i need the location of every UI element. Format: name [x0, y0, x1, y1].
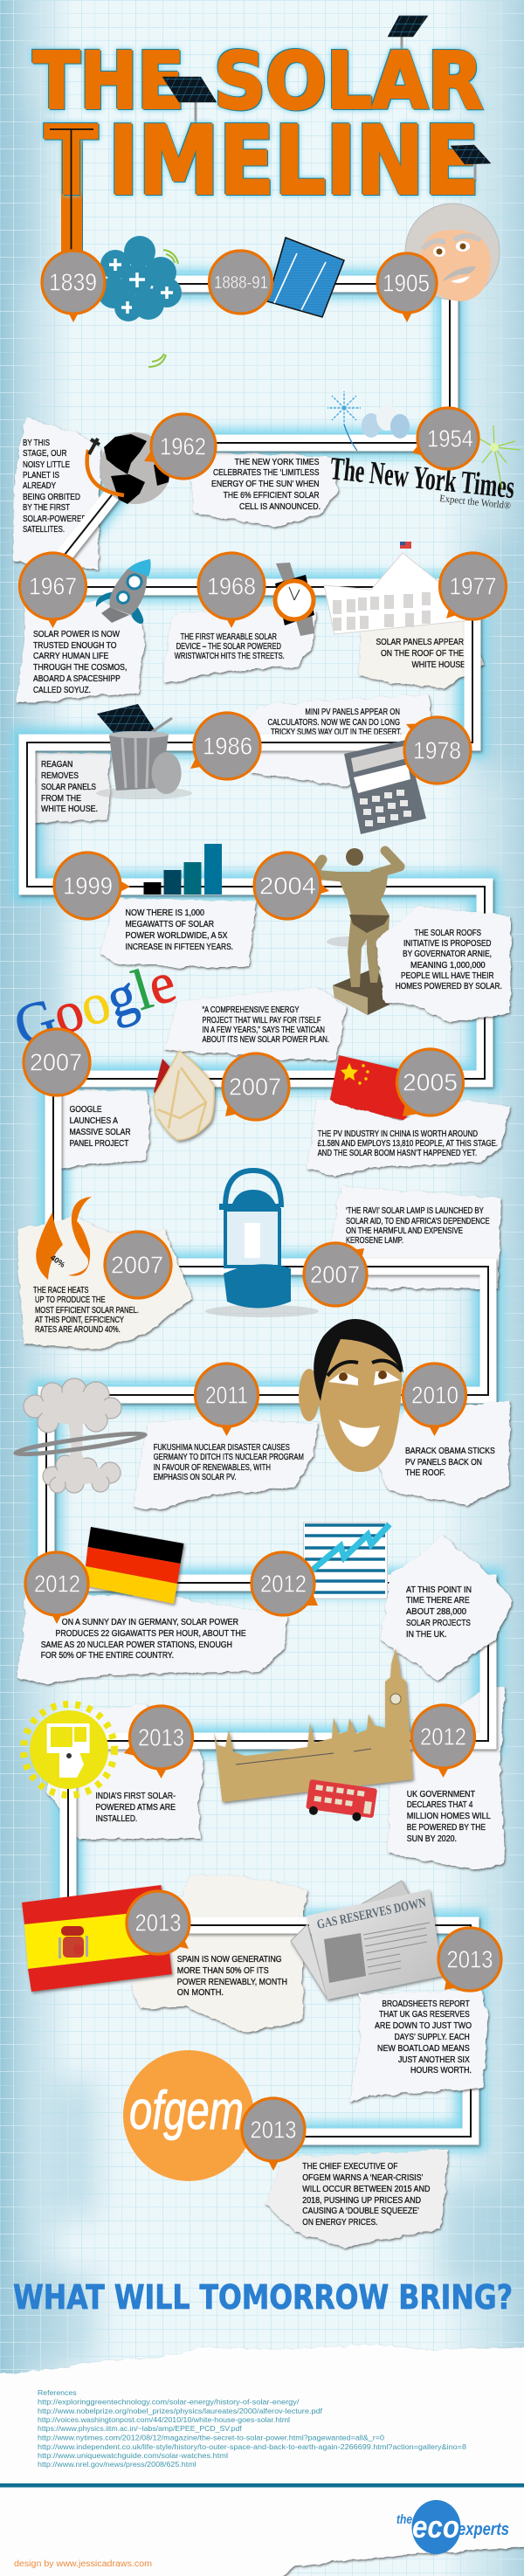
year marker: 1967: 1967 — [29, 573, 77, 599]
note: 2007 Google: MASSIVE SOLAR — [70, 1128, 131, 1137]
note: 1962 satellites: NOISY LITTLE — [23, 460, 70, 470]
note: 2013 Spain: MORE THAN 50% OF ITS — [177, 1966, 269, 1976]
year marker: 2007 efficiency: 2007 — [111, 1251, 163, 1279]
note: 1977 White House: WHITE HOUSE — [412, 660, 465, 670]
note: 2007 efficiency race: MOST EFFICIENT SOLAR PANEL. — [35, 1306, 139, 1316]
note: 2004 solar roofs: INITIATIVE IS PROPOSED — [403, 939, 491, 949]
note: 2004 solar roofs — [376, 907, 511, 1022]
note: 2004 solar roofs: PEOPLE WILL HAVE THEIR — [401, 971, 494, 981]
note: 1978 calculators: CALCULATORS. NOW WE CAN DO LONG — [267, 718, 400, 728]
note: 2004 solar roofs: THE SOLAR ROOFS — [414, 929, 481, 938]
icon: Houses of Parliament — [214, 1648, 413, 1802]
title stem: orange T running to 1839 — [61, 123, 82, 254]
note: 2011 Fukushima: FUKUSHIMA NUCLEAR DISASTER CAUSES — [154, 1443, 290, 1453]
year marker: 1954 — [412, 408, 479, 469]
note: 2013 India: INDIA’S FIRST SOLAR- — [95, 1792, 176, 1801]
icon: calculator — [344, 740, 426, 834]
chart icon: rising arrow — [304, 1523, 390, 1599]
note: 1962 satellites: BY THE FIRST — [23, 503, 70, 513]
note: 2012 solar projects: AT THIS POINT IN — [406, 1585, 472, 1595]
rail glow — [27, 284, 488, 2137]
icon: green firework — [476, 425, 521, 489]
note: 1986 Reagan: WHITE HOUSE. — [41, 805, 98, 814]
note: 1977 White House: SOLAR PANELS APPEAR — [376, 638, 464, 647]
note: 2013 gas reserves: THAT UK GAS RESERVES — [379, 2010, 470, 2020]
year marker: 2010 — [403, 1364, 466, 1436]
note: 2007 efficiency race: UP TO PRODUCE THE — [35, 1295, 106, 1305]
note: 2013 Spain: SPAIN IS NOW GENERATING — [177, 1955, 282, 1965]
note: 2007 Ravi lamp: KEROSENE LAMP. — [346, 1236, 403, 1246]
year marker: 2012 Germany: 2012 — [34, 1571, 80, 1597]
icon: solar cell — [267, 238, 344, 317]
note: 1978 calculators: TRICKY SUMS WAY OUT IN THE DESERT. — [271, 728, 402, 737]
note: 2007 Vatican — [164, 987, 346, 1060]
year marker: 2007 efficiency — [105, 1232, 171, 1298]
note: 2007 Vatican: PROJECT THAT WILL PAY FOR ITSELF — [203, 1016, 321, 1026]
logo: the eco experts — [396, 2500, 509, 2554]
references: References — [38, 2388, 77, 2397]
note: 2013 gas reserves: NEW BOATLOAD MEANS — [377, 2044, 470, 2054]
note: 2013 gas reserves — [349, 1990, 488, 2103]
year marker: 1954: 1954 — [427, 425, 473, 452]
year marker: 2005 — [396, 1049, 463, 1116]
year marker: 2013 gas reserves: 2013 — [447, 1946, 493, 1972]
year marker: 2004: 2004 — [259, 872, 316, 900]
note: 2007 Vatican: “A COMPREHENSIVE ENERGY — [203, 1005, 300, 1015]
references: http://exploringgreentechnology.com/solar-energy/history-of-solar-energy/ — [38, 2398, 300, 2407]
year marker: 2007 lamp — [304, 1243, 367, 1306]
note: 2012 solar projects: IN THE UK. — [406, 1630, 447, 1640]
note: 2012 UK government — [388, 1686, 505, 1869]
note: 1999 megawatts: NOW THERE IS 1,000 — [126, 908, 204, 918]
note: 2011 Fukushima: IN FAVOUR OF RENEWABLES, WITH — [154, 1463, 271, 1473]
icon: atom cluster — [98, 236, 182, 367]
icon: Obama — [299, 1319, 403, 1472]
year marker: 2013 India: 2013 — [138, 1724, 184, 1751]
note: 2005 China: AND THE SOLAR BOOM HASN’T HAPPENED YET. — [318, 1149, 477, 1158]
note: 1968 wristwatch — [164, 607, 316, 683]
note: 1999 megawatts — [100, 898, 256, 967]
year marker: 1977 — [440, 553, 507, 619]
references: http://www.independent.co.uk/life-style/history/to-outer-space-and-back-to-earth-again-2266699.html?action=gallery&ino=8 — [38, 2442, 466, 2451]
note: 2012 UK government: BE POWERED BY THE — [407, 1823, 486, 1833]
note: 2013 India: POWERED ATMS ARE — [95, 1803, 176, 1813]
note: 1962 New York Times: THE 6% EFFICIENT SOLAR — [224, 491, 320, 501]
note: 2013 Ofgem: 2018, PUSHING UP PRICES AND — [302, 2196, 421, 2206]
references: http://voices.washingtonpost.com/44/2010/10/white-house-goes-solar.html — [38, 2415, 290, 2424]
note: 2010 Obama — [377, 1400, 510, 1505]
note: 2012 Germany: ON A SUNNY DAY IN GERMANY, SOLAR POWER — [62, 1618, 238, 1627]
note: 2007 efficiency race: THE RACE HEATS — [33, 1286, 89, 1295]
year marker: 2004 — [254, 853, 329, 919]
note: 2007 efficiency race: RATES ARE AROUND 40%. — [35, 1325, 121, 1335]
year marker: 1968: 1968 — [207, 573, 256, 599]
icon: sun ATM — [24, 1704, 114, 1795]
icon: rocket — [96, 559, 151, 624]
note: 2012 UK government: SUN BY 2020. — [407, 1834, 457, 1844]
note: 2012 solar projects — [381, 1535, 513, 1680]
references: http://www.uniquewatchguide.com/solar-watches.html — [38, 2451, 228, 2460]
year marker: 2011: 2011 — [205, 1382, 248, 1408]
logo: Google: Google — [7, 950, 183, 1059]
note: 1967 Soyuz: CARRY HUMAN LIFE — [33, 652, 109, 661]
note: 2012 UK government: UK GOVERNMENT — [407, 1790, 475, 1799]
note: 1986 Reagan: SOLAR PANELS — [41, 783, 96, 792]
icon: papal mitre — [154, 1051, 214, 1140]
year marker: 1986 — [190, 713, 260, 779]
note: 1962 New York Times — [192, 452, 337, 527]
note: 1962 satellites: BEING ORBITED — [23, 493, 80, 502]
icon: White House — [324, 542, 488, 634]
note: 2005 China — [307, 1099, 510, 1177]
icon: trash can with solar panel — [96, 704, 192, 799]
note: 2012 Germany: SAME AS 20 NUCLEAR POWER STATIONS, ENOUGH — [41, 1640, 232, 1650]
note: 1962 New York Times: THE NEW YORK TIMES — [235, 458, 320, 467]
year marker: 1968 — [198, 553, 265, 628]
note: 2012 solar projects: TIME THERE ARE — [406, 1596, 470, 1606]
year marker: 2013 Spain: 2013 — [134, 1910, 182, 1936]
title: The Solar Timeline — [33, 16, 491, 254]
note: 2004 solar roofs: BY GOVERNATOR ARNIE, — [403, 950, 492, 959]
note: 2007 efficiency race: AT THIS POINT, EFFICIENCY — [35, 1316, 124, 1325]
year marker: 2012 UK: 2012 — [420, 1723, 466, 1751]
note: 1962 satellites: ALREADY — [23, 481, 56, 491]
note: 2012 Germany: FOR 50% OF THE ENTIRE COUNTRY. — [41, 1651, 174, 1661]
note: 2013 Spain — [130, 1875, 307, 2033]
year marker: 2013 India — [124, 1706, 192, 1778]
note: 1967 Soyuz: SOLAR POWER IS NOW — [33, 630, 120, 639]
year marker: 2013 gas reserves — [438, 1928, 501, 1991]
icon: Einstein — [405, 204, 500, 301]
year marker: 1978 — [404, 717, 471, 784]
panel icon: title solar panels — [196, 16, 475, 182]
year marker: 2011 — [196, 1364, 259, 1436]
note: 1986 Reagan: REMOVES — [41, 771, 79, 781]
note: 2012 UK government: DECLARES THAT 4 — [407, 1800, 473, 1810]
note: 1962 satellites — [13, 418, 100, 570]
icon: Arnie statue — [313, 848, 400, 1015]
year markers — [19, 251, 507, 2171]
icon: solar lantern — [205, 1171, 319, 1317]
note: 2012 solar projects: SOLAR PROJECTS — [406, 1619, 471, 1628]
note: 2004 solar roofs: HOMES POWERED BY SOLAR. — [396, 982, 502, 991]
title: The Solar Timeline: SOLAR — [214, 35, 483, 126]
logo: Ofgem: ofgem — [129, 2081, 244, 2141]
note: 2007 Google: LAUNCHES A — [70, 1116, 118, 1126]
logo: the eco experts: experts — [458, 2520, 509, 2539]
year marker: 2013 Ofgem: 2013 — [250, 2116, 297, 2144]
note: 1977 White House — [359, 620, 483, 688]
note: 2011 Fukushima — [134, 1418, 318, 1509]
note: 1968 wristwatch: WRISTWATCH HITS THE STREETS. — [175, 652, 285, 661]
references: http://www.nytimes.com/2012/08/12/magazine/the-secret-to-solar-power.html?pagewanted=all&_r=0 — [38, 2434, 384, 2442]
icon: Spain flag — [22, 1885, 172, 1992]
note: 1962 satellites: SATELLITES. — [23, 525, 65, 535]
note: 2013 gas reserves: ARE DOWN TO JUST TWO — [375, 2021, 472, 2031]
year marker: 1905: 1905 — [383, 269, 430, 297]
note: 2007 Ravi lamp: ‘THE RAVI’ SOLAR LAMP IS LAUNCHED BY — [346, 1206, 484, 1216]
note: 1967 Soyuz: ABOARD A SPACESHIPP — [33, 674, 121, 684]
year marker: 2013 Ofgem — [242, 2098, 305, 2171]
bar chart: 1999 growth — [143, 844, 222, 894]
year marker: 1839: 1839 — [49, 269, 97, 295]
year marker: 2005: 2005 — [403, 1069, 458, 1095]
note: 1986 Reagan: REAGAN — [41, 760, 72, 770]
note: 2012 UK government: MILLION HOMES WILL — [407, 1812, 491, 1821]
note: 1967 Soyuz: THROUGH THE COSMOS, — [33, 663, 127, 673]
note: 2007 Google — [55, 1089, 150, 1168]
note: 2005 China: THE PV INDUSTRY IN CHINA IS WORTH AROUND — [318, 1129, 478, 1139]
note: 2010 Obama: PV PANELS BACK ON — [405, 1458, 482, 1468]
year marker: 2007 Vatican: 2007 — [229, 1073, 281, 1101]
year marker: 2007 Google: 2007 — [30, 1048, 82, 1076]
note: 1999 megawatts: INCREASE IN FIFTEEN YEARS. — [126, 943, 233, 952]
note: 1999 megawatts: MEGAWATTS OF SOLAR — [126, 920, 214, 929]
note: 2007 Ravi lamp: ON THE HARMFUL AND EXPENSIVE — [346, 1226, 463, 1236]
note: 2013 Ofgem: OFGEM WARNS A ‘NEAR-CRISIS’ — [302, 2173, 423, 2183]
year marker: 2010: 2010 — [411, 1382, 458, 1408]
note: 2007 Google: GOOGLE — [70, 1105, 102, 1115]
note: 1962 New York Times: ENERGY OF THE SUN’ WHEN — [211, 480, 320, 489]
note: 1967 Soyuz: CALLED SOYUZ. — [33, 686, 91, 695]
note: 1978 calculators — [247, 694, 431, 786]
note: 2010 Obama: BARACK OBAMA STICKS — [405, 1447, 495, 1456]
note: 2013 Ofgem: THE CHIEF EXECUTIVE OF — [302, 2162, 397, 2172]
year marker: 1888-91 — [210, 251, 272, 314]
icon: flame: 40% — [49, 1253, 66, 1269]
year marker: 1999 — [54, 853, 130, 919]
title: The Solar Timeline: T — [45, 107, 98, 217]
note: 1977 White House: ON THE ROOF OF THE — [381, 649, 464, 659]
note: 1978 calculators: MINI PV PANELS APPEAR ON — [305, 708, 400, 717]
references: https://www.physics.iitm.ac.in/~labs/amp/EPEE_PCD_SV.pdf — [38, 2424, 242, 2433]
note: 2013 gas reserves: JUST ANOTHER SIX — [398, 2055, 470, 2065]
year marker: 2007 lamp: 2007 — [310, 1261, 360, 1288]
year marker: 2012 UK — [412, 1705, 475, 1778]
title: The Solar Timeline: THE — [33, 35, 184, 126]
note: 1962 satellites: SOLAR-POWERED — [23, 515, 87, 524]
references: http://www.nobelprize.org/nobel_prizes/physics/laureates/2000/alferov-lecture.pdf — [38, 2407, 323, 2415]
note: 2007 Google: PANEL PROJECT — [70, 1139, 128, 1149]
credit: design by www.jessicadraws.com — [14, 2559, 152, 2569]
icon: newspaper: GAS RESERVES DOWN — [316, 1896, 427, 1932]
year marker: 1905 — [377, 253, 437, 322]
note: 2013 Ofgem: CAUSING A ‘DOUBLE SQUEEZE’ — [302, 2207, 419, 2216]
icon: China flag — [329, 1055, 410, 1121]
year marker: 1888-91: 1888-91 — [214, 273, 268, 293]
note: 2013 Ofgem: ON ENERGY PRICES. — [302, 2218, 377, 2227]
year marker: 1962: 1962 — [160, 433, 206, 459]
note: 1967 Soyuz — [17, 601, 144, 703]
note: 2013 gas reserves: DAYS’ SUPPLY. EACH — [395, 2033, 470, 2042]
logo: the eco experts: the — [396, 2512, 412, 2527]
note: 2007 Ravi lamp — [330, 1186, 501, 1288]
icon: globe and satellite — [87, 432, 171, 504]
note: 1962 New York Times: CELL IS ANNOUNCED. — [239, 502, 321, 512]
icon: wristwatch — [275, 563, 314, 636]
note: 2013 Ofgem: WILL OCCUR BETWEEN 2015 AND — [302, 2185, 430, 2194]
note: 1962 satellites: STAGE, OUR — [23, 449, 66, 459]
icon: newspaper — [291, 1881, 443, 1999]
year marker: 1986: 1986 — [203, 732, 252, 760]
note: 1986 Reagan: FROM THE — [41, 794, 81, 804]
references — [38, 2388, 466, 2469]
note: 2007 Vatican: ABOUT ITS NEW SOLAR POWER PLAN. — [203, 1035, 329, 1045]
year marker: 2012 chart: 2012 — [260, 1571, 307, 1597]
note: 2011 Fukushima: EMPHASIS ON SOLAR PV. — [154, 1473, 237, 1482]
note: 2011 Fukushima: GERMANY TO DITCH ITS NUCLEAR PROGRAM — [154, 1453, 304, 1462]
icon: flame — [36, 1197, 92, 1280]
footer torn paper — [0, 2345, 524, 2576]
year marker: 2013 Spain — [127, 1891, 190, 1954]
icon: mushroom cloud — [15, 1378, 146, 1493]
note: 2013 India: INSTALLED. — [95, 1814, 137, 1824]
note: 2013 Spain: ON MONTH. — [177, 1988, 224, 1998]
icon: fireworks and balloons — [328, 391, 410, 451]
note: 1968 wristwatch: THE FIRST WEARABLE SOLAR — [181, 632, 277, 642]
note: 2013 Spain: POWER RENEWABLY, MONTH — [177, 1978, 287, 1987]
note: 1962 satellites: PLANET IS — [23, 471, 59, 480]
note: 2013 Ofgem — [265, 2149, 448, 2248]
logo: the eco experts: eco — [412, 2509, 459, 2545]
timeline rail — [27, 284, 488, 2137]
note: 2007 Vatican: IN A FEW YEARS,” SAYS THE VATICAN — [203, 1026, 325, 1035]
note: 2010 Obama: THE ROOF. — [405, 1468, 445, 1478]
note: 1967 Soyuz: TRUSTED ENOUGH TO — [33, 641, 117, 651]
logo: Ofgem — [123, 2050, 254, 2181]
year marker: 1978: 1978 — [413, 737, 461, 763]
note: 1968 wristwatch: DEVICE – THE SOLAR POWERED — [176, 642, 281, 652]
icon: red bus — [305, 1779, 377, 1823]
year marker: 1962 — [144, 414, 216, 479]
icon: Germany flag — [84, 1527, 183, 1604]
note: 1986 Reagan — [35, 753, 110, 823]
year marker: 2007 Vatican — [223, 1053, 289, 1120]
year marker: 2012 chart — [252, 1552, 318, 1615]
note: 2012 Germany: PRODUCES 22 GIGAWATTS PER HOUR, ABOUT THE — [56, 1629, 246, 1639]
note: 2013 India — [48, 1705, 203, 1839]
logo: New York Times: Expect the World® — [439, 494, 512, 512]
year marker: 1967 — [19, 553, 86, 628]
note: 1999 megawatts: POWER WORLDWIDE, A 5X — [126, 931, 228, 941]
note: 1962 satellites: BY THIS — [23, 439, 50, 448]
year marker: 2012 Germany — [25, 1552, 88, 1624]
year marker: 2007 Google — [24, 1029, 90, 1095]
references: http://www.nrel.gov/news/press/2008/625.html — [38, 2460, 196, 2469]
note: 2004 solar roofs: MEANING 1,000,000 — [410, 961, 486, 970]
note: 2012 solar projects: ABOUT 288,000 — [406, 1607, 466, 1617]
note: 2013 gas reserves: BROADSHEETS REPORT — [382, 1999, 470, 2009]
year marker: 1839 — [42, 251, 105, 322]
note: 1962 New York Times: CELEBRATES THE ‘LIMITLESS — [213, 468, 320, 478]
year marker: 1999: 1999 — [63, 872, 113, 900]
note: 2012 Germany — [17, 1594, 287, 1684]
note: 2007 efficiency race — [17, 1217, 192, 1350]
year marker: 1977: 1977 — [449, 573, 496, 599]
note: 2013 gas reserves: HOURS WORTH. — [410, 2066, 472, 2075]
